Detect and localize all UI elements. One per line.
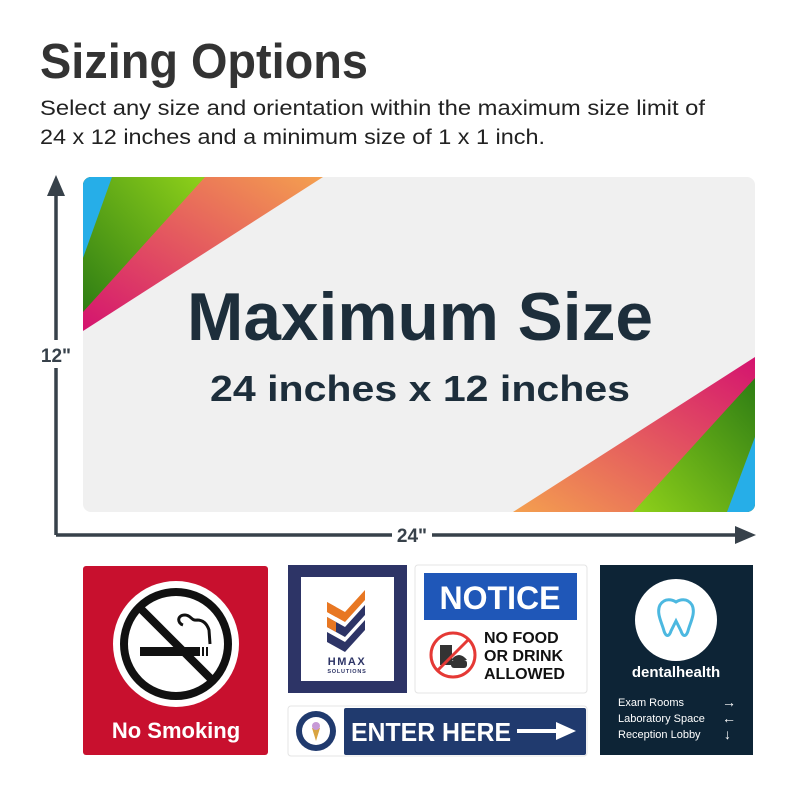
panel: HMAX sign: SOLUTIONS xyxy=(327,669,367,675)
panel: HMAX sign xyxy=(288,565,407,693)
panel: maximum size card xyxy=(83,177,755,512)
panel: HMAX sign: HMAX xyxy=(328,656,366,668)
arrow: horizontal 24 inch xyxy=(56,522,756,550)
icon: HMAX chevrons xyxy=(327,590,365,652)
panel: notice sign: NO FOOD xyxy=(484,630,559,647)
icon: tooth xyxy=(659,600,693,636)
text: dimensions: 24 inches x 12 inches xyxy=(210,368,630,409)
panel: dentalhealth sign: ← xyxy=(722,710,736,726)
arrow: vertical 12 inch: 12" xyxy=(41,346,71,367)
panel: enter here sign xyxy=(288,706,587,756)
panel: notice sign: NOTICE xyxy=(440,580,560,616)
icon: badge xyxy=(296,711,336,751)
title: Sizing Options xyxy=(40,35,368,89)
panel: dentalhealth sign: Reception Lobby xyxy=(618,729,701,741)
arrow: vertical 12 inch xyxy=(38,175,74,535)
icon: no food xyxy=(431,633,475,677)
panel: no smoking sign: No Smoking xyxy=(112,718,240,743)
panel: enter here sign: ENTER HERE xyxy=(351,717,511,747)
icon: cigarette xyxy=(140,615,210,656)
panel: dentalhealth sign: → xyxy=(722,694,736,710)
arrow: horizontal 24 inch: 24" xyxy=(397,526,427,547)
panel: notice sign: OR DRINK xyxy=(484,648,564,665)
subtitle: Select any size and orientation within the maximum size limit of xyxy=(40,97,705,120)
panel: dentalhealth sign: Laboratory Space xyxy=(618,713,705,725)
panel: notice sign: ALLOWED xyxy=(484,666,565,683)
subtitle xyxy=(40,97,705,149)
panel: dentalhealth sign: dentalhealth xyxy=(632,664,720,681)
panel: no smoking sign xyxy=(83,566,268,755)
subtitle: 24 x 12 inches and a minimum size of 1 x 1 inch. xyxy=(40,126,545,149)
panel: dentalhealth sign: Exam Rooms xyxy=(618,697,685,709)
panel: notice sign xyxy=(415,565,587,693)
heading: Maximum Size: Maximum Size xyxy=(187,279,653,355)
panel: dentalhealth sign: ↓ xyxy=(724,726,731,742)
panel: dentalhealth sign xyxy=(600,565,753,755)
arrow: right xyxy=(517,722,576,740)
